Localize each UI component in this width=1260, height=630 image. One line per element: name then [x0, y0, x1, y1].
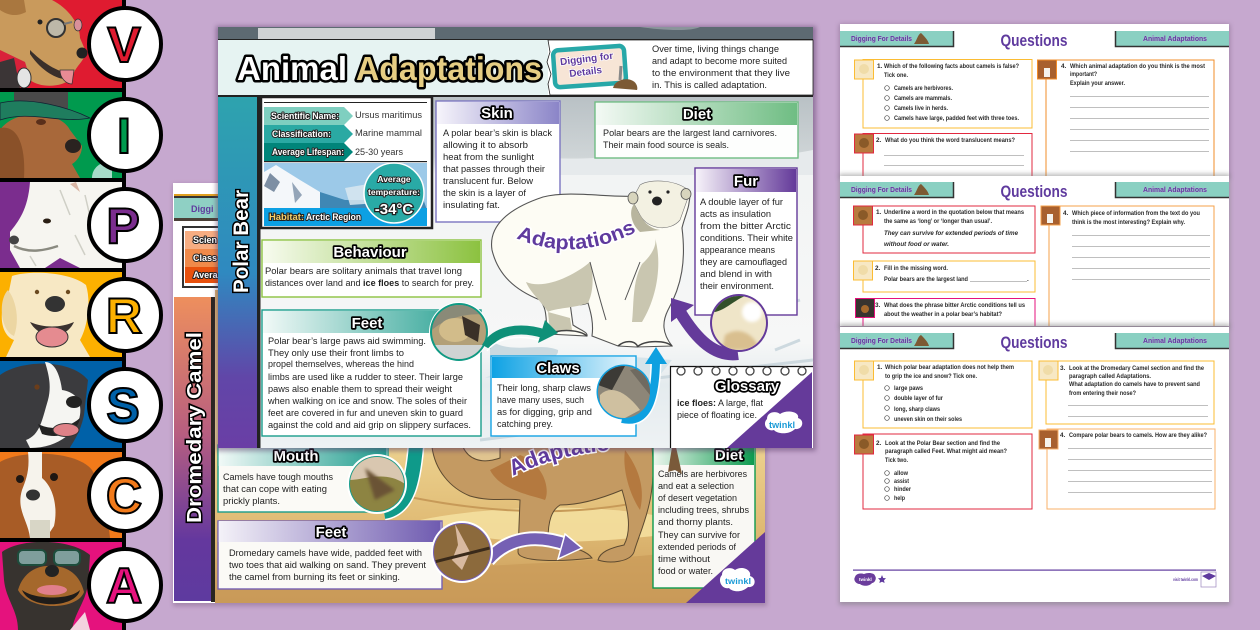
panel: feet: limbs are used like a rudder to steer. Their large — [268, 372, 463, 383]
polar bear side strip — [218, 97, 260, 448]
camel fact box: Avera — [193, 270, 219, 280]
camel fact box: Class — [193, 253, 217, 263]
question 2: Polar bears are the largest land — [884, 276, 968, 283]
twinkl logo — [765, 411, 802, 433]
question 1: Camels are herbivores. — [894, 85, 953, 92]
panel: fur: they are camouflaged — [700, 257, 787, 268]
question 1: uneven skin on their soles — [894, 416, 962, 423]
strip dividers — [0, 0, 126, 630]
question 1: long, sharp claws — [894, 406, 940, 413]
teal arrow: mouth — [384, 446, 416, 512]
question 3 — [1039, 361, 1214, 424]
question 1: without food or water. — [884, 241, 949, 248]
letter P badge — [89, 189, 161, 261]
question 2: What do you think the word translucent means? — [885, 137, 1015, 144]
habitat image: Habitat: — [269, 212, 304, 222]
panel: claws: have many uses, such — [497, 395, 584, 406]
panel: mouth: that can cope with eating — [223, 484, 327, 495]
question 1: to grip the ice and snow? Tick one. — [885, 373, 977, 380]
question 4: Which animal adaptation do you think is the most — [1070, 63, 1206, 70]
question 1: Tick one. — [884, 72, 908, 79]
question 4: Which piece of information from the text do you — [1072, 210, 1200, 217]
page 3 header left — [840, 333, 954, 348]
page 2 header right: Animal Adaptations — [1143, 185, 1207, 194]
panel: diet — [595, 102, 798, 158]
page 2 header left — [840, 182, 954, 198]
title: Adaptations — [356, 50, 542, 87]
panel: camel diet: They can survive for — [658, 530, 741, 541]
question 1 — [854, 60, 1032, 128]
I band: dog with green hat — [0, 92, 122, 178]
intro text — [652, 44, 790, 91]
panel: skin: that passes through their — [443, 164, 546, 175]
mouth photo — [347, 454, 407, 514]
panel: VIPERS reading dog strip — [0, 0, 161, 630]
panel: camel diet: including trees, shrubs — [658, 505, 749, 516]
question 2 — [854, 134, 1032, 176]
question 4: 4. — [1061, 63, 1067, 70]
camel side strip: Dromedary Camel — [184, 332, 206, 523]
S band: border collie — [0, 361, 122, 448]
intro text: in. This is called adaptation. — [652, 80, 767, 91]
lifespan row — [264, 143, 403, 161]
panel: diet: Their main food source is seals. — [603, 140, 729, 151]
panel: camel diet: food or water. — [658, 566, 713, 577]
question 4: 4. — [1063, 210, 1069, 217]
page 3 header left: Digging For Details — [851, 336, 912, 345]
lifespan row: Average Lifespan: — [272, 147, 344, 157]
A band: rottweiler with glasses — [0, 542, 122, 630]
question 4: Explain your answer. — [1070, 80, 1125, 87]
page footer: visit twinkl.com — [1173, 577, 1198, 582]
panel: fur: Fur — [734, 173, 758, 190]
intro text: to the environment that they live — [652, 68, 790, 79]
question 4 — [1039, 429, 1215, 509]
panel: fur — [695, 168, 797, 315]
temperature badge: Average — [377, 174, 411, 184]
question 1: Underline a word in the quotation below that means — [884, 209, 1024, 216]
intro text: Over time, living things change — [652, 44, 779, 55]
V band: dog with glasses — [0, 0, 122, 88]
habitat image: Arctic Region — [306, 212, 361, 222]
R band: golden dog — [0, 272, 122, 357]
question 3: from entering their nose? — [1069, 390, 1136, 397]
panel: fur: their environment. — [700, 281, 774, 292]
question 3: 3. — [1060, 365, 1066, 372]
panel: camel diet: Diet — [715, 447, 743, 464]
question 4 — [1041, 206, 1214, 326]
panel: glossary — [670, 366, 813, 448]
panel: camel diet: and thorny plants. — [658, 517, 733, 528]
temperature badge — [364, 163, 424, 223]
panel: camel feet: two toes that aid walking on sand. They prevent — [229, 560, 426, 571]
panel: fur: appearance means — [700, 245, 775, 256]
question 4: important? — [1070, 71, 1097, 78]
twinkl corner — [686, 532, 765, 603]
question 3: 3. — [875, 302, 881, 309]
panel: mouth — [218, 445, 407, 514]
question 3: Look at the Dromedary Camel section and find the — [1069, 365, 1204, 372]
question 2 — [854, 261, 1035, 292]
question 1 — [854, 361, 1032, 428]
panel: claws — [491, 356, 636, 436]
panel: camel diet — [653, 445, 755, 588]
page 3 header right: Animal Adaptations — [1143, 336, 1207, 345]
question 1 — [854, 206, 1035, 253]
camel poster header strip: Diggi — [191, 204, 214, 214]
camel side strip — [174, 297, 215, 602]
panel: skin: allowing it to absorb — [443, 140, 528, 151]
camel fact box — [183, 227, 233, 287]
panel: worksheet page 3 — [839, 324, 1230, 605]
question 3: paragraph called Adaptations. — [1069, 373, 1151, 380]
panel: feet: against the cold and aid grip on slippery surfaces. — [268, 420, 471, 431]
question 2: 2. — [876, 440, 882, 447]
panel: feet: Feet — [352, 315, 382, 332]
panel: fur: and blend in with — [700, 269, 772, 280]
adaptations arc label: Adaptations — [514, 222, 636, 254]
panel: claws: Claws — [536, 360, 580, 377]
letter V badge — [89, 8, 161, 80]
question 1: Camels have large, padded feet with three toes. — [894, 115, 1019, 122]
top image strip — [218, 27, 813, 40]
panel: diet: Polar bears are the largest land carnivores. — [603, 128, 777, 139]
scientific name row: Ursus maritimus — [355, 109, 422, 120]
temperature badge: -34°C — [375, 201, 413, 218]
letter P badge: P — [106, 198, 140, 254]
panel: behaviour: Behaviour — [333, 244, 407, 261]
page 2 header right — [1115, 182, 1229, 198]
panel: skin — [436, 101, 560, 222]
twinkl corner: twinkl — [725, 576, 751, 586]
page 2 header left: Digging For Details — [851, 185, 912, 194]
habitat image — [264, 163, 427, 226]
page 3 header right — [1115, 333, 1229, 348]
panel: feet — [262, 302, 489, 436]
polar bear side strip: Polar Bear — [230, 190, 253, 293]
question 2: allow — [894, 470, 908, 477]
arrow: claws — [622, 347, 667, 420]
panel: skin: the skin is a layer of — [443, 188, 526, 199]
question 1: Which polar bear adaptation does not help them — [885, 364, 1014, 371]
page footer: twinkl — [859, 577, 872, 582]
page 1 title: Questions — [1000, 31, 1068, 50]
panel: fur: conditions. Their white — [700, 233, 793, 244]
panel: camel feet: Feet — [316, 524, 346, 541]
panel: Polar Bear poster (front) — [213, 24, 818, 454]
letter C badge — [89, 459, 161, 531]
title — [237, 50, 542, 87]
question 1: Camels live in herds. — [894, 105, 948, 112]
question 4: Compare polar bears to camels. How are they alike? — [1069, 432, 1207, 439]
page 1 header right: Animal Adaptations — [1143, 34, 1207, 43]
letter S badge — [89, 369, 161, 441]
question 3: What adaptation do camels have to prevent sand — [1069, 381, 1200, 388]
panel: feet: paws also enable them to spread their weight — [268, 384, 452, 395]
question 2: 2. — [875, 265, 881, 272]
question 1: 1. — [877, 364, 883, 371]
question 2: help — [894, 495, 905, 502]
panel: fur: acts as insulation — [700, 209, 771, 220]
illustration: polar bear — [492, 181, 691, 347]
panel: Dromedary Camel poster (behind) — [171, 182, 769, 608]
question 4: 4. — [1060, 432, 1066, 439]
question 1: the same as ‘long’ or ‘longer than usual’. — [884, 218, 992, 225]
panel: camel diet: Camels are herbivores — [658, 469, 747, 480]
classification row — [264, 125, 422, 143]
panel: camel diet: and eat a selection — [658, 481, 734, 492]
question 2: . — [1027, 276, 1029, 283]
title header band — [218, 40, 813, 98]
question 2: assist — [894, 478, 910, 485]
badge: digging for details: Details — [569, 65, 603, 80]
panel: skin: Skin — [481, 105, 513, 122]
letter V badge: V — [107, 17, 141, 73]
panel: feet: They only use their front limbs to — [268, 348, 404, 359]
page 1 header left: Digging For Details — [851, 34, 912, 43]
letter A badge: A — [106, 558, 142, 614]
question 1: large paws — [894, 385, 923, 392]
letter S badge: S — [106, 378, 140, 434]
badge: digging for details: Digging for — [560, 51, 614, 68]
arrow: fur — [671, 298, 738, 354]
P band: white dog — [0, 182, 122, 268]
panel: skin: translucent fur. Below — [443, 176, 533, 187]
question 3: What does the phrase bitter Arctic conditions tell us — [884, 302, 1025, 309]
arrow: feet — [486, 320, 558, 351]
question 1: 1. — [876, 209, 882, 216]
letter I badge: I — [117, 108, 131, 164]
camel tail tuft — [668, 447, 682, 474]
panel: feet: propel themselves, whereas the hind — [268, 359, 414, 370]
question 1: Camels are mammals. — [894, 95, 952, 102]
panel: diet: Diet — [683, 106, 711, 123]
panel: skin: heat from the sunlight — [443, 152, 534, 163]
lifespan row: 25-30 years — [355, 146, 403, 157]
purple arrow: feet — [488, 534, 582, 560]
panel: fur: A double layer of fur — [700, 197, 784, 208]
C band: spaniel — [0, 452, 122, 538]
question 1: They can survive for extended periods of time — [884, 230, 1018, 237]
panel: behaviour: distances over land and ice floes to search for prey. — [265, 278, 474, 289]
panel: claws: Their long, sharp claws — [497, 383, 591, 394]
camel fact box: Scien — [193, 235, 217, 245]
panel: glossary: Glossary — [715, 378, 780, 395]
question 3 — [856, 298, 1035, 326]
question 4 — [1038, 60, 1214, 176]
page 2 title: Questions — [1000, 182, 1068, 201]
question 3: about the weather in a polar bear’s habitat? — [884, 311, 1002, 318]
panel: camel diet: time without — [658, 554, 710, 565]
claws photo — [596, 364, 652, 420]
panel: camel feet: the camel from burning its feet or sinking. — [229, 572, 400, 583]
panel: feet: Polar bear’s large paws aid swimming. — [268, 336, 426, 347]
panel: feet: feet are covered in fur and uneven skin to guard — [268, 408, 463, 419]
notebook rings — [677, 367, 806, 375]
question 2: paragraph called Feet. What might aid mean? — [885, 448, 1007, 455]
panel: mouth: prickly plants. — [223, 496, 280, 507]
panel: skin: insulating fat. — [443, 200, 500, 211]
page 3 title: Questions — [1000, 333, 1068, 352]
snowy background — [260, 97, 813, 448]
question 1: 1. — [877, 63, 883, 70]
panel: feet: when walking on ice and snow. The soles of their — [267, 396, 468, 407]
temperature badge: temperature: — [368, 187, 420, 197]
panel: skin: A polar bear’s skin is black — [443, 128, 552, 139]
question 2: Tick two. — [885, 457, 908, 464]
page 1 header left — [840, 31, 954, 46]
letter I badge — [89, 99, 161, 171]
panel: camel feet — [218, 521, 493, 589]
classification row: Classification: — [272, 129, 331, 139]
fur photo — [710, 294, 768, 352]
panel: polar bear facts — [261, 97, 432, 228]
panel: camel feet: Dromedary camels have wide, padded feet with — [229, 548, 422, 559]
page footer — [853, 570, 1216, 587]
panel: claws: catching prey. — [497, 419, 553, 430]
intro text: and adapt to become more suited — [652, 56, 787, 67]
twinkl logo: twinkl — [769, 420, 795, 430]
panel: behaviour — [262, 240, 481, 297]
question 2 — [854, 434, 1032, 509]
letter R badge: R — [106, 288, 142, 344]
panel: camel diet: extended periods of — [658, 542, 736, 553]
question 2: 2. — [876, 137, 882, 144]
page 1 header right — [1115, 31, 1229, 46]
camel feet photo — [431, 521, 493, 583]
panel: claws: as for digging, grip and — [497, 407, 592, 418]
panel: camel diet: of desert vegetation — [658, 493, 737, 504]
classification row: Marine mammal — [355, 127, 422, 138]
panel: worksheet page 1 — [839, 24, 1230, 178]
feet photo — [429, 302, 489, 362]
scientific name row: Scientific Name: — [271, 111, 339, 121]
letter R badge — [89, 279, 161, 351]
panel: behaviour: Polar bears are solitary animals that travel long — [265, 266, 462, 277]
camel poster header strip — [174, 198, 224, 221]
letter A badge — [89, 549, 161, 621]
scientific name row — [264, 107, 422, 125]
question 2: hinder — [894, 486, 911, 493]
panel: worksheet page 2 — [839, 174, 1230, 328]
sand background — [215, 290, 765, 603]
panel: fur: from the bitter Arctic — [700, 221, 791, 232]
question 4: think is the most interesting? Explain why. — [1072, 219, 1185, 226]
camel illustration — [432, 447, 653, 562]
panel: mouth: Camels have tough mouths — [223, 472, 333, 483]
question 1: double layer of fur — [894, 395, 943, 402]
letter C badge: C — [106, 468, 142, 524]
title: Animal — [237, 50, 347, 87]
question 1: Which of the following facts about camels is false? — [884, 63, 1019, 70]
panel: glossary: piece of floating ice. — [677, 410, 757, 421]
badge: digging for details — [553, 46, 637, 90]
panel: glossary: ice floes: A large, flat — [677, 398, 763, 409]
question 2: Look at the Polar Bear section and find the — [885, 440, 1000, 447]
panel: mouth: Mouth — [274, 448, 318, 465]
question 2: Fill in the missing word. — [884, 265, 948, 272]
